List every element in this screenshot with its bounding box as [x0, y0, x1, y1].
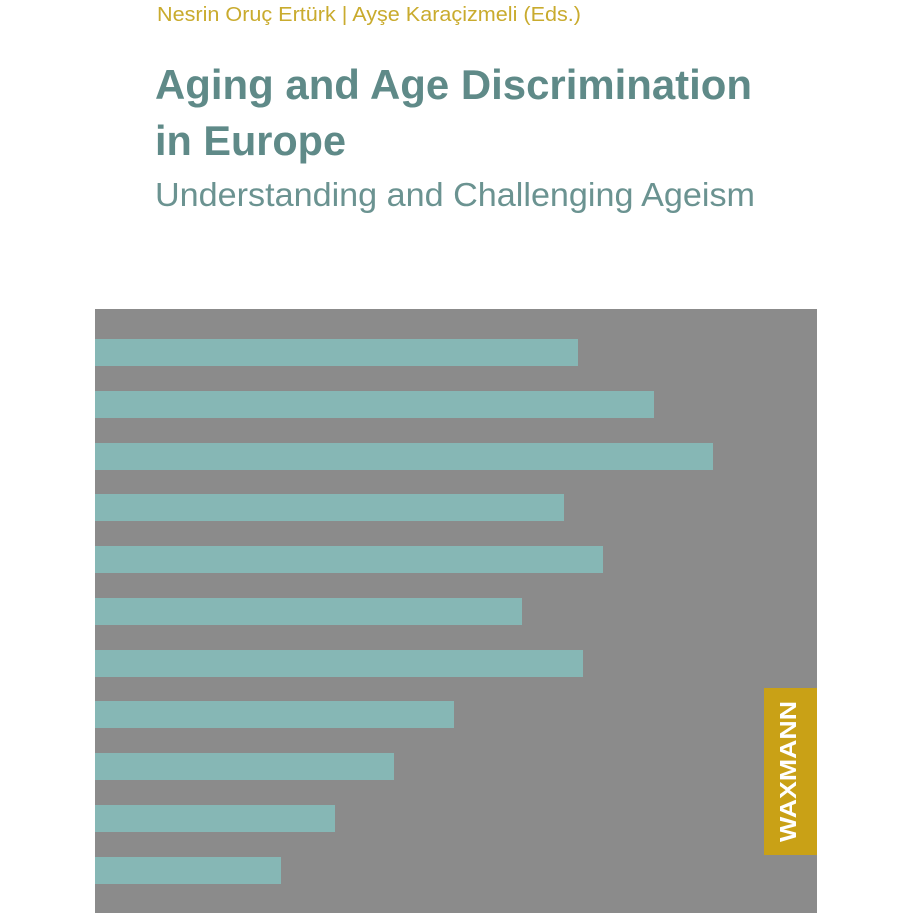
editors line: Nesrin Oruç Ertürk | Ayşe Karaçizmeli (Eds.)	[157, 4, 581, 26]
bar chart	[95, 339, 713, 884]
title: in Europe	[155, 117, 346, 164]
publisher logo: Waxmann: WAXMANN	[775, 701, 801, 842]
panel: grey cover area with bar chart	[95, 309, 817, 913]
subtitle: Understanding and Challenging Ageism	[155, 176, 755, 213]
title	[155, 61, 752, 164]
publisher logo: Waxmann	[764, 688, 817, 855]
title: Aging and Age Discrimination	[155, 61, 752, 108]
